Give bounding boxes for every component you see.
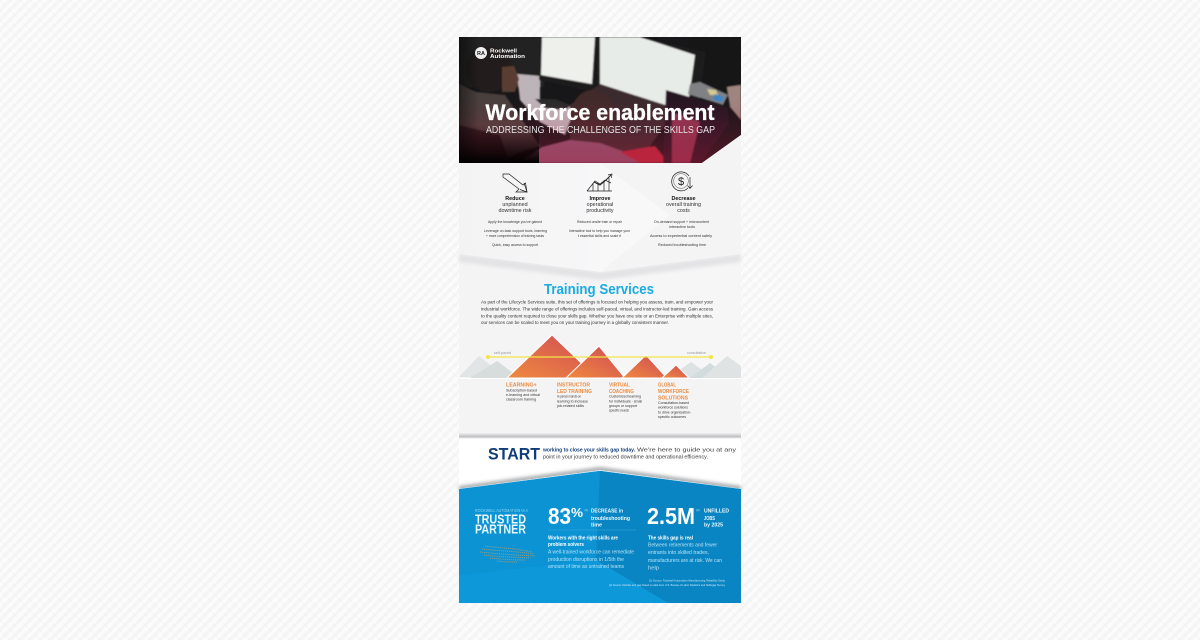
service: global workforce solutions: to drive organization-: [658, 410, 692, 414]
benefit: improve: Improve: [590, 196, 610, 202]
benefit: reduce: Apply the knowledge you've gained: [488, 220, 542, 224]
text block: problem solvers: Workers with the right skills are: [548, 536, 618, 542]
heading: Training Services: Training Services: [544, 282, 654, 298]
benefit: improve: Reduced onsite train or repair: [577, 220, 623, 224]
text block: skills gap: [648, 536, 722, 572]
service: virtual coaching: COACHING: [609, 389, 634, 395]
panel: hero photo: [459, 37, 741, 163]
icon: Rockwell Automation logo: [475, 47, 525, 60]
text block: start message: working to close your skills gap today.: [542, 448, 635, 454]
benefit: reduce: Leverage on-task support tools, learning: [484, 229, 547, 233]
text block: skills gap: manufacturers are at risk. We can: [648, 558, 722, 564]
stat: 83% decrease: time: [591, 522, 602, 528]
title: Workforce enablement: [486, 100, 715, 125]
panel: trusted partner: [459, 467, 741, 603]
service: virtual coaching: [609, 382, 642, 412]
panel: infographic: [459, 37, 741, 603]
stat: 83% decrease: [548, 503, 630, 529]
service: global workforce solutions: [658, 382, 692, 419]
stat: 2.5M unfilled jobs: UNFILLED: [704, 508, 729, 514]
text block: intro: [481, 300, 714, 326]
service: instructor-led training: LED TRAINING: [557, 389, 592, 395]
stat: 2.5M unfilled jobs: [647, 503, 729, 529]
benefit: improve: productivity: [586, 208, 614, 214]
chart: progression line: [486, 351, 713, 359]
text block: skills gap: Between retirements and fewer: [648, 542, 717, 548]
service: instructor-led training: learning to increase: [557, 400, 588, 404]
icon: rising chart: [587, 174, 612, 191]
service: learning+: [506, 382, 540, 402]
icon: dollar decrease: $: [678, 176, 684, 188]
service: virtual coaching: for individuals - small: [609, 400, 642, 404]
service: global workforce solutions: workforce solutions: [658, 406, 688, 410]
panel: training services: [459, 250, 741, 435]
text block: skills gap: The skills gap is real: [648, 536, 693, 542]
stat: 83% decrease: (1): [584, 508, 588, 512]
service: learning+: e-learning and virtual: [506, 393, 540, 397]
text block: start message: [542, 448, 736, 460]
text block: start message: point in your journey to reduced downtime and operational efficiency.: [543, 454, 708, 460]
benefit: decrease: interactive tools: [669, 225, 695, 229]
chart: progression line: consultative: [687, 351, 706, 355]
service: global workforce solutions: Consultation-based: [658, 401, 689, 405]
benefit: decrease: On-demand support + microcontent: [654, 220, 709, 224]
icon: Rockwell Automation logo: Automation: [490, 54, 525, 60]
benefit: reduce: downtime risk: [499, 208, 532, 214]
icon: down-trending arrow: [503, 174, 527, 192]
text block: trusted partner: [475, 508, 529, 536]
heading: START: START: [488, 444, 541, 464]
text block: problem solvers: [548, 536, 634, 570]
text block: start message: We're here to guide you at any: [637, 448, 736, 454]
service: instructor-led training: job-related skills: [556, 404, 584, 408]
benefit: decrease: Access to experiential content safely: [650, 234, 712, 238]
benefit: improve: operational: [587, 202, 613, 208]
benefit: improve: t essential skills and scale it: [578, 234, 621, 238]
text block: sources: (1) Source: Rockwell Automation Manufacturing Reliability Study: [649, 578, 725, 582]
text block: problem solvers: production disruptions in 1/5th the: [548, 557, 624, 563]
text block: trusted partner: TRUSTED: [475, 512, 526, 526]
chart: progression line: self-paced: [494, 351, 511, 355]
chart: orange training mountains: [507, 335, 689, 378]
stat: 83% decrease: 83: [548, 503, 571, 529]
service: global workforce solutions: GLOBAL: [658, 382, 677, 388]
benefit: decrease: costs: [677, 208, 690, 214]
icon: Rockwell Automation logo: Rockwell: [490, 48, 518, 54]
service: virtual coaching: VIRTUAL: [609, 382, 631, 388]
text block: intro: industrial workforce. The wide range of offerings includes self-paced, virtual, and instructor-led training. Gain access: [481, 306, 714, 312]
icon: Rockwell Automation logo: RA: [477, 51, 485, 57]
text block: sources: (2) Source: Deloitte and gap based on data from U.S. Bureau of Labor Statistics and Skillsgap Survey: [609, 583, 725, 587]
stat: 2.5M unfilled jobs: (2): [696, 508, 700, 512]
service: global workforce solutions: WORKFORCE: [658, 389, 689, 395]
icon: dollar decrease: [672, 172, 692, 191]
service: global workforce solutions: specific outcomes: [658, 415, 686, 419]
icon: orange dotted wave: [480, 546, 535, 562]
service: virtual coaching: Customized learning: [609, 394, 641, 398]
benefit: reduce: [484, 196, 547, 247]
text block: problem solvers: problem solvers: [548, 542, 584, 548]
panel: start call to action: [459, 433, 741, 492]
benefit: reduce: + more comprehension of training tasks: [486, 234, 544, 238]
stat: 83% decrease: %: [571, 505, 583, 520]
benefit: reduce: unplanned: [502, 202, 528, 208]
service: learning+: classroom training: [506, 398, 536, 402]
benefit: decrease: Reduced troubleshooting time: [658, 243, 706, 247]
benefit: decrease: overall training: [666, 202, 701, 208]
stat: 83% decrease: DECREASE in: [591, 508, 623, 514]
service: learning+: Subscription-based: [506, 388, 537, 392]
text block: trusted partner: PARTNER: [475, 522, 526, 536]
benefit: decrease: [650, 196, 712, 247]
service: virtual coaching: groups or support: [609, 404, 637, 408]
service: instructor-led training: In-person hands-on: [557, 394, 581, 398]
text block: intro: to the quality content required to close your skills gap. Whether you have one site or an Enterprise with multiple sites,: [481, 314, 713, 320]
benefit: reduce: Reduce: [505, 196, 525, 202]
text block: trusted partner: ROCKWELL AUTOMATION IS A: [475, 508, 529, 513]
stat: 2.5M unfilled jobs: 2.5M: [647, 503, 695, 529]
benefit: decrease: Decrease: [672, 196, 695, 202]
benefit: improve: [569, 196, 631, 238]
service: instructor-led training: [556, 382, 592, 408]
stat: 83% decrease: troubleshooting: [591, 516, 630, 522]
panel: benefits: [459, 135, 741, 272]
text block: sources: [609, 578, 725, 587]
service: global workforce solutions: SOLUTIONS: [658, 396, 688, 402]
benefit: improve: Interactive tool to help you manage your: [569, 229, 631, 233]
stat: 2.5M unfilled jobs: by 2025: [704, 522, 723, 528]
text block: problem solvers: A well-trained workforce can remediate: [548, 550, 634, 556]
text block: skills gap: entrants into skilled trades,: [648, 550, 709, 556]
benefit: reduce: Quick, easy access to support: [492, 243, 538, 247]
service: learning+: LEARNING+: [506, 382, 537, 388]
stat: 2.5M unfilled jobs: JOBS: [704, 516, 715, 522]
subtitle: ADDRESSING THE CHALLENGES OF THE SKILLS GAP: [486, 125, 715, 136]
text block: problem solvers: amount of time as untrained teams: [548, 564, 624, 570]
text block: skills gap: help: [648, 566, 659, 572]
light corner: [702, 135, 741, 163]
chart: pale background mountains: [459, 356, 741, 378]
text block: intro: our services can be scaled to meet you on your training journey in a globally consistent manner.: [481, 320, 669, 326]
service: virtual coaching: specific needs: [609, 408, 629, 412]
text block: intro: As part of the Lifecycle Services suite, this set of offerings is focused on helping you assess, train, and empower your: [481, 300, 713, 306]
service: instructor-led training: INSTRUCTOR: [557, 382, 590, 388]
